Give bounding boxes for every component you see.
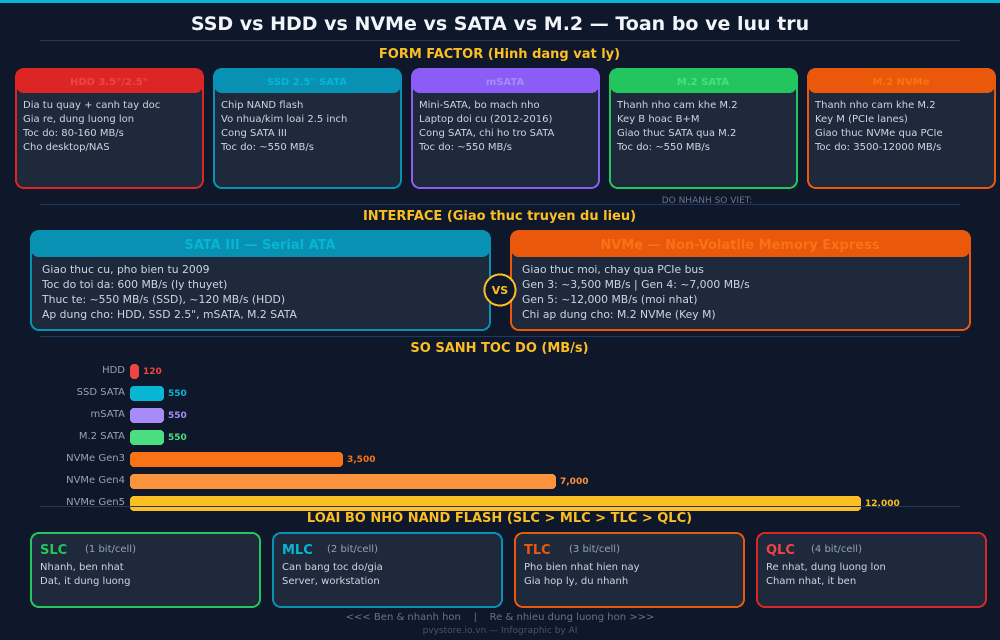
card: TLC: Gia hop ly, du nhanh [524, 576, 628, 587]
bar: NVMe Gen3: 3,500 [347, 455, 375, 465]
card: MLC: (2 bit/cell) [327, 544, 378, 555]
bar: SSD SATA: 550 [168, 389, 187, 399]
card: MLC: Server, workstation [282, 576, 380, 587]
card: QLC: QLC [766, 543, 795, 558]
bar: NVMe Gen4: 7,000 [560, 477, 588, 487]
card: MLC: MLC [282, 543, 313, 558]
icon: VS badge [484, 274, 516, 306]
bar: NVMe Gen4 [66, 474, 588, 489]
card: M.2 NVMe: M.2 NVMe [872, 77, 930, 88]
panel: SATA III [31, 231, 490, 330]
panel: NVMe: Gen 3: ~3,500 MB/s | Gen 4: ~7,000 MB/s [522, 278, 750, 291]
bar: HDD [102, 364, 162, 379]
card: QLC [757, 533, 986, 607]
bar: HDD: 120 [143, 367, 162, 377]
card: M.2 NVMe: Thanh nho cam khe M.2 [814, 100, 936, 111]
card: HDD [16, 69, 203, 188]
bar: NVMe Gen3: NVMe Gen3 [66, 453, 125, 464]
panel: NAND cards [31, 533, 986, 607]
card: HDD: Gia re, dung luong lon [23, 114, 134, 125]
bar: HDD: HDD [102, 365, 125, 376]
heading: NAND types: LOAI BO NHO NAND FLASH (SLC > MLC > TLC > QLC) [307, 511, 692, 526]
card: M.2 SATA: Key B hoac B+M [617, 114, 699, 125]
bar: NVMe Gen5: NVMe Gen5 [66, 497, 125, 508]
card: M.2 NVMe: Toc do: 3500-12000 MB/s [814, 142, 941, 153]
card: M.2 NVMe: Key M (PCIe lanes) [815, 114, 908, 125]
panel: form factor cards [16, 69, 995, 188]
card: SSD 2.5 SATA: SSD 2.5" SATA [267, 77, 347, 88]
bar: NVMe Gen5: 12,000 [865, 499, 900, 509]
card: mSATA: Mini-SATA, bo mach nho [419, 100, 540, 111]
card: QLC: Cham nhat, it ben [766, 576, 856, 587]
card: SSD 2.5 SATA: Cong SATA III [221, 128, 287, 139]
panel: NVMe [511, 231, 970, 330]
card: SLC [31, 533, 260, 607]
bar: SSD SATA: SSD SATA [77, 387, 125, 398]
bar: M.2 SATA: M.2 SATA [79, 431, 125, 442]
panel: SATA III: Giao thuc cu, pho bien tu 2009 [42, 263, 210, 276]
bar: SSD SATA [77, 386, 187, 401]
card: SLC: (1 bit/cell) [85, 544, 136, 555]
card: SSD 2.5 SATA [214, 69, 401, 188]
card: mSATA: Toc do: ~550 MB/s [418, 142, 512, 153]
card: MLC [273, 533, 502, 607]
bar: mSATA: 550 [168, 411, 187, 421]
bar: NVMe Gen4: NVMe Gen4 [66, 475, 125, 486]
panel: NVMe: Giao thuc moi, chay qua PCIe bus [522, 263, 704, 276]
card: mSATA: mSATA [486, 77, 524, 88]
panel: NVMe: Chi ap dung cho: M.2 NVMe (Key M) [522, 308, 716, 321]
card: M.2 SATA [610, 69, 797, 188]
bar: NVMe Gen5 [66, 496, 900, 511]
heading: speed comparison: SO SANH TOC DO (MB/s) [410, 341, 589, 356]
bar chart: speed [66, 364, 900, 511]
card: SLC: SLC [40, 543, 67, 558]
card: HDD: HDD 3.5"/2.5" [70, 77, 148, 88]
card: SSD 2.5 SATA: Chip NAND flash [221, 100, 303, 111]
card: HDD: Cho desktop/NAS [23, 142, 110, 153]
card: QLC: Re nhat, dung luong lon [766, 562, 886, 573]
bar: mSATA: mSATA [90, 409, 125, 420]
card: TLC: TLC [524, 543, 551, 558]
heading: interface: INTERFACE (Giao thuc truyen du lieu) [363, 209, 636, 224]
card: M.2 NVMe [808, 69, 995, 188]
endurance scale caption: <<< Ben & nhanh hon | Re & nhieu dung luong hon >>> [346, 612, 654, 623]
icon: VS badge: VS [492, 284, 508, 297]
panel: SATA III: Toc do toi da: 600 MB/s (ly thuyet) [41, 278, 227, 291]
panel: SATA III: Ap dung cho: HDD, SSD 2.5", mSATA, M.2 SATA [42, 308, 298, 321]
heading: form factor: FORM FACTOR (Hinh dang vat ly) [379, 47, 620, 62]
card: MLC: Can bang toc do/gia [282, 562, 383, 573]
card: M.2 NVMe: Giao thuc NVMe qua PCIe [815, 128, 943, 139]
bar: mSATA [90, 408, 187, 423]
card: SSD 2.5 SATA: Vo nhua/kim loai 2.5 inch [221, 114, 347, 125]
card: QLC: (4 bit/cell) [811, 544, 862, 555]
card: M.2 SATA: Giao thuc SATA qua M.2 [617, 128, 736, 139]
card: SLC: Dat, it dung luong [40, 576, 130, 587]
panel: SATA III: Thuc te: ~550 MB/s (SSD), ~120 MB/s (HDD) [41, 293, 285, 306]
card: mSATA: Laptop doi cu (2012-2016) [419, 114, 552, 125]
title: SSD vs HDD vs NVMe vs SATA vs M.2 — Toan bo ve luu tru [191, 13, 809, 35]
bar: NVMe Gen3 [66, 452, 375, 467]
card: TLC: (3 bit/cell) [569, 544, 620, 555]
card: M.2 SATA: Toc do: ~550 MB/s [616, 142, 710, 153]
card: mSATA: Cong SATA, chi ho tro SATA [419, 128, 555, 139]
card: mSATA [412, 69, 599, 188]
card: TLC: Pho bien nhat hien nay [524, 562, 640, 573]
footer credit: pvystore.io.vn — Infographic by AI [423, 626, 577, 636]
card: M.2 SATA: M.2 SATA [677, 77, 729, 88]
small note: DO NHANH SO VIET: [662, 196, 752, 206]
panel: NVMe: NVMe — Non-Volatile Memory Express [600, 238, 880, 253]
bar: M.2 SATA: 550 [168, 433, 187, 443]
card: SLC: Nhanh, ben nhat [40, 562, 124, 573]
card: HDD: Toc do: 80-160 MB/s [22, 128, 124, 139]
card: M.2 SATA: Thanh nho cam khe M.2 [616, 100, 738, 111]
panel: NVMe: Gen 5: ~12,000 MB/s (moi nhat) [522, 293, 697, 306]
panel: SATA III: SATA III — Serial ATA [184, 238, 336, 253]
bar: M.2 SATA [79, 430, 187, 445]
card: TLC [515, 533, 744, 607]
card: HDD: Dia tu quay + canh tay doc [23, 100, 160, 111]
card: SSD 2.5 SATA: Toc do: ~550 MB/s [220, 142, 314, 153]
